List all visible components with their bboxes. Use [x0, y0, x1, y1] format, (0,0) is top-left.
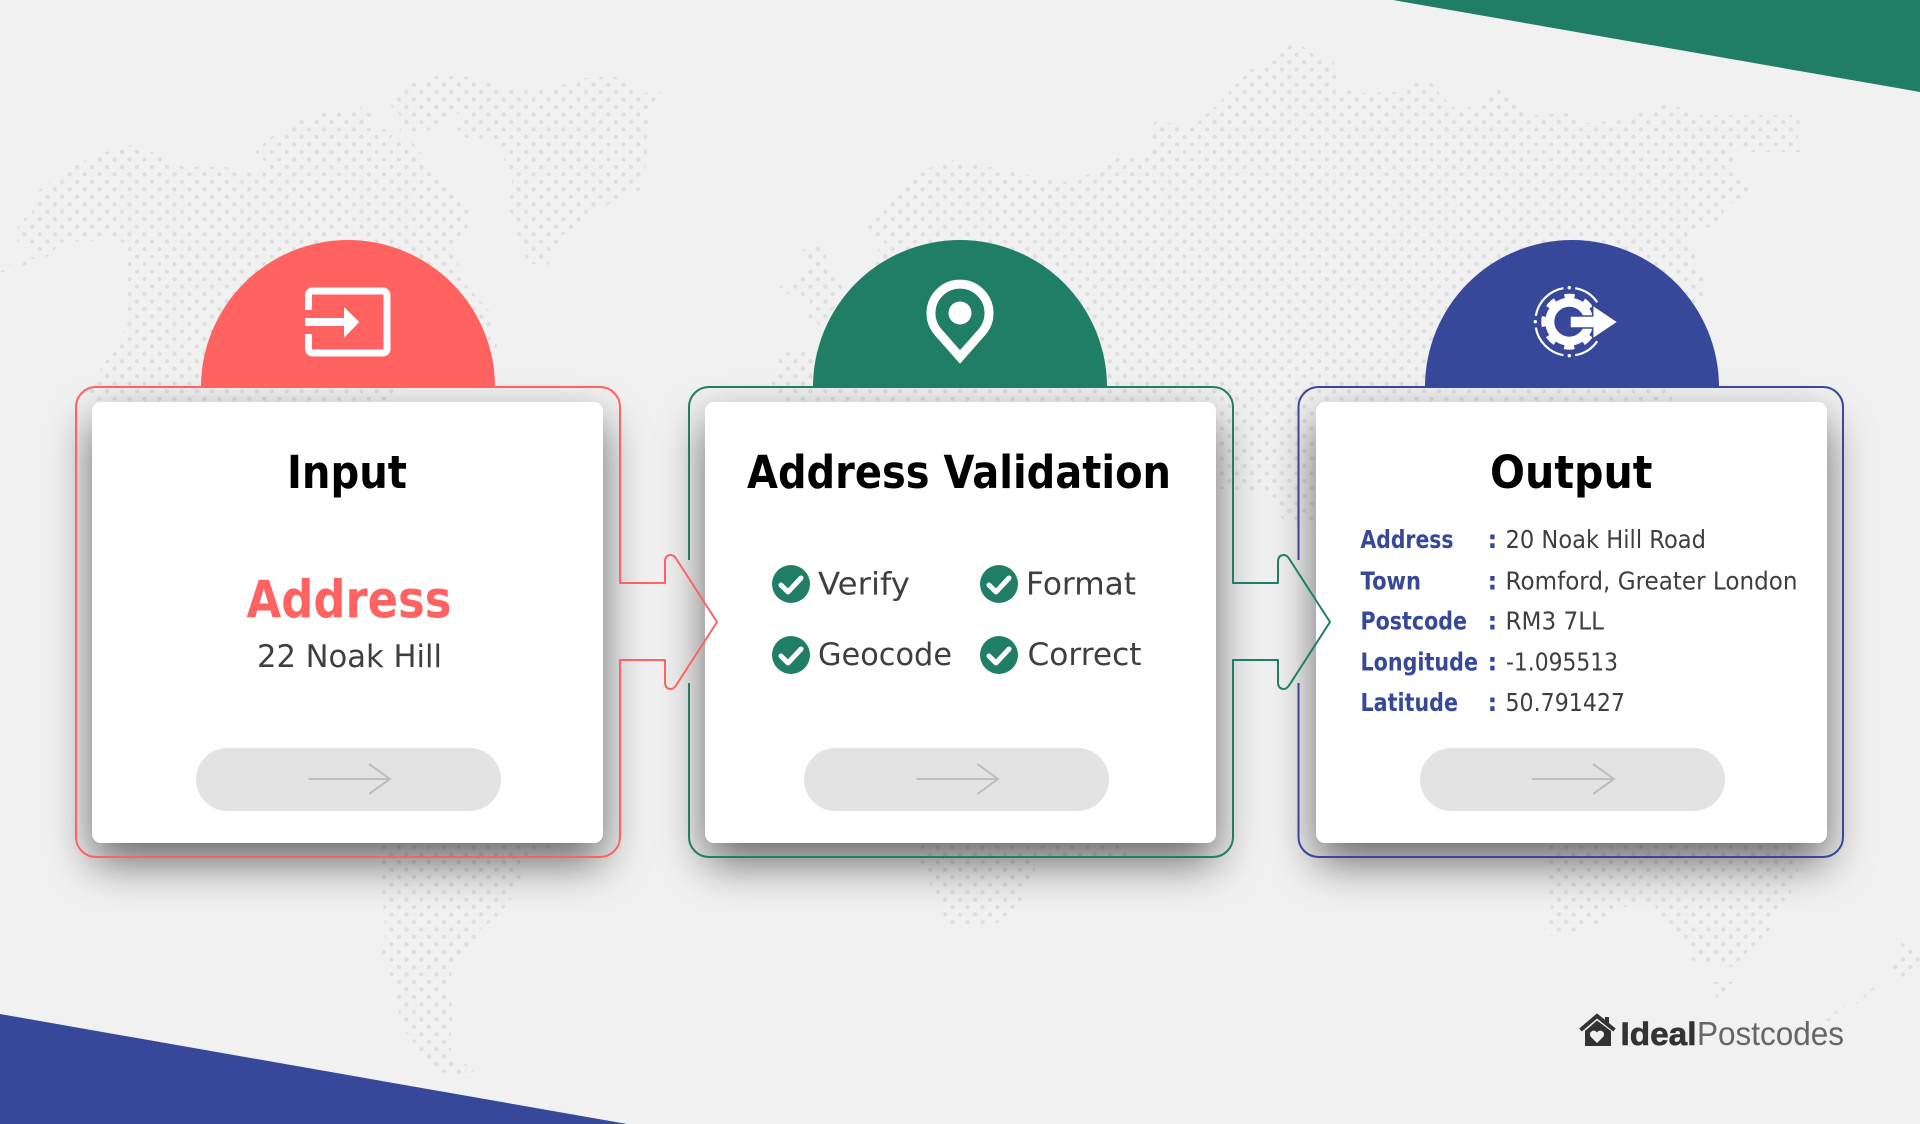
heading: output: Output: [1490, 446, 1652, 499]
row: postcode: Postcode: [1360, 606, 1467, 636]
row: longitude: Longitude: [1360, 648, 1478, 676]
icon: house with heart: [1580, 1016, 1614, 1046]
semicircle header: [813, 240, 1107, 388]
check: verify: Verify: [818, 566, 910, 602]
semicircle header: [1425, 240, 1719, 388]
icon: map pin: [931, 284, 989, 357]
row: longitude: [1360, 648, 1618, 676]
row: address: [1360, 525, 1706, 554]
row: town: :: [1488, 566, 1497, 596]
check: verify: [772, 565, 910, 603]
row: longitude: :: [1488, 648, 1497, 676]
check: geocode: Geocode: [818, 637, 952, 673]
row: latitude: :: [1488, 688, 1497, 717]
row: latitude: 50.791427: [1506, 688, 1625, 717]
frame with arrow: address validation: [688, 386, 1331, 858]
corner: blue bottom-left wedge: [0, 1014, 627, 1124]
row: longitude: -1.095513: [1506, 648, 1618, 676]
heading: input: Input: [287, 446, 407, 499]
icon: input arrow into box: [305, 291, 387, 353]
frame: output: [1298, 386, 1844, 858]
check: format: [980, 565, 1136, 603]
row: latitude: Latitude: [1360, 688, 1458, 717]
check: format: Format: [1026, 566, 1136, 602]
panel: input: [60, 240, 636, 896]
logo: Ideal Postcodes: [1579, 1013, 1844, 1052]
check: geocode: [772, 636, 952, 674]
row: address: Address: [1360, 525, 1454, 554]
button with arrow: [804, 748, 1109, 811]
panel: output: [1284, 240, 1860, 896]
row: town: Romford, Greater London: [1506, 566, 1798, 596]
row: town: Town: [1360, 566, 1421, 596]
button with arrow: [196, 748, 501, 811]
icon: gear with output arrow: [1534, 286, 1618, 357]
heading: address validation: Address Validation: [747, 446, 1171, 499]
row: postcode: [1360, 606, 1604, 636]
panel: address validation: [672, 240, 1248, 896]
frame with arrow: input: [75, 386, 718, 858]
row: latitude: [1360, 688, 1625, 717]
address value: 22 Noak Hill: [257, 639, 442, 675]
button with arrow: [1420, 748, 1725, 811]
check: correct: [980, 636, 1142, 674]
semicircle header: [201, 240, 495, 388]
corner: green top-right wedge: [1393, 0, 1920, 92]
wordmark: Ideal: [1620, 1016, 1696, 1052]
row: address: 20 Noak Hill Road: [1506, 525, 1706, 554]
row: address: :: [1488, 525, 1497, 554]
row: postcode: RM3 7LL: [1506, 606, 1604, 636]
wordmark: Postcodes: [1697, 1015, 1844, 1052]
address label: Address: [246, 570, 452, 630]
row: postcode: :: [1488, 606, 1497, 636]
check: correct: Correct: [1028, 637, 1142, 673]
row: town: [1360, 566, 1798, 596]
